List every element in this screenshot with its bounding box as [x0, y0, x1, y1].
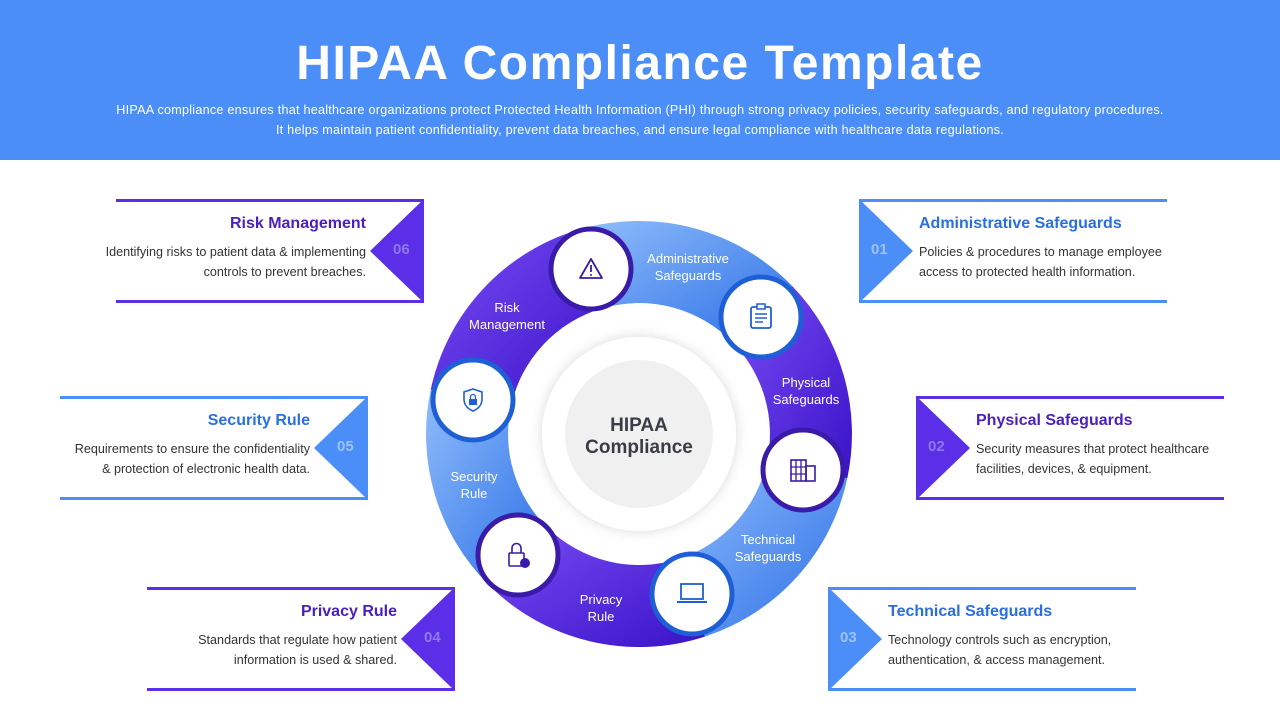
card: 06 risk management: [106, 199, 424, 303]
segment: administrative: [580, 221, 792, 343]
segment labels: Rule: [588, 609, 614, 624]
segment: security: [426, 390, 546, 585]
center disc: Compliance: [585, 437, 693, 458]
card: 02 physical safeguards: 02: [928, 438, 945, 455]
subtitle: It helps maintain patient confidentiality, prevent data breaches, and ensure legal compliance with healthcare data regulations.: [276, 123, 1004, 137]
icon: lock user: [478, 515, 558, 595]
segment labels: Rule: [461, 486, 487, 501]
segment labels: Privacy: [580, 592, 623, 607]
card: 04 privacy rule: Standards that regulate how patient: [198, 633, 397, 647]
card: 01 administrative safeguards: access to protected health information.: [919, 265, 1135, 279]
card: 02 physical safeguards: [916, 396, 1224, 500]
icon: warning: [551, 229, 631, 309]
segment: risk: [431, 229, 603, 407]
card: 03 technical safeguards: Technical Safeguards: [888, 603, 1052, 620]
title: HIPAA Compliance Template: [296, 37, 984, 90]
card: 06 risk management: 06: [393, 241, 410, 258]
card: 01 administrative safeguards: Policies & procedures to manage employee: [919, 245, 1162, 259]
card: 04 privacy rule: information is used & shared.: [234, 653, 397, 667]
header banner: [0, 0, 1280, 160]
card: 02 physical safeguards: Physical Safeguards: [976, 412, 1133, 429]
segment labels: Management: [469, 317, 545, 332]
card: 03 technical safeguards: [828, 587, 1136, 691]
segment labels: Risk: [494, 300, 520, 315]
card: 06 risk management: Risk Management: [230, 215, 366, 232]
card: 05 security rule: Requirements to ensure the confidentiality: [75, 442, 310, 456]
icon: building: [763, 430, 843, 510]
icon: clipboard: [721, 277, 801, 357]
card: 04 privacy rule: 04: [424, 629, 441, 646]
card: 01 administrative safeguards: Administrative Safeguards: [919, 215, 1122, 232]
segment: technical: [680, 461, 847, 637]
segment labels: Safeguards: [773, 392, 840, 407]
card: 06 risk management: controls to prevent breaches.: [204, 265, 366, 279]
segment labels: Safeguards: [655, 268, 722, 283]
card: 03 technical safeguards: authentication, & access management.: [888, 653, 1105, 667]
card: 02 physical safeguards: Security measures that protect healthcare: [976, 442, 1209, 456]
card: 06 risk management: Identifying risks to patient data & implementing: [106, 245, 366, 259]
subtitle: [116, 103, 1164, 137]
center disc: HIPAA: [610, 415, 668, 436]
card: 05 security rule: 05: [337, 438, 354, 455]
card: 04 privacy rule: Privacy Rule: [301, 603, 397, 620]
card: 04 privacy rule: [147, 587, 455, 691]
card: 01 administrative safeguards: 01: [871, 241, 888, 258]
card: 05 security rule: Security Rule: [208, 412, 310, 429]
card: 01 administrative safeguards: [859, 199, 1167, 303]
card: 03 technical safeguards: 03: [840, 629, 857, 646]
icon: shield: [433, 360, 513, 440]
segment: physical: [733, 286, 852, 478]
card: 05 security rule: [60, 396, 368, 500]
center disc: [542, 337, 736, 531]
segment labels: Administrative: [647, 251, 729, 266]
segment labels: Safeguards: [735, 549, 802, 564]
card: 05 security rule: & protection of electronic health data.: [102, 462, 310, 476]
segment labels: Technical: [741, 532, 795, 547]
icon: laptop: [652, 554, 732, 634]
segment: privacy: [488, 527, 705, 647]
card: 03 technical safeguards: Technology controls such as encryption,: [888, 633, 1111, 647]
subtitle: HIPAA compliance ensures that healthcare organizations protect Protected Health Information (PHI) through strong privacy policies, security safeguards, and regulatory procedures.: [116, 103, 1164, 117]
segment labels: Physical: [782, 375, 830, 390]
card: 02 physical safeguards: facilities, devices, & equipment.: [976, 462, 1152, 476]
segment labels: [451, 251, 840, 624]
segment labels: Security: [451, 469, 498, 484]
